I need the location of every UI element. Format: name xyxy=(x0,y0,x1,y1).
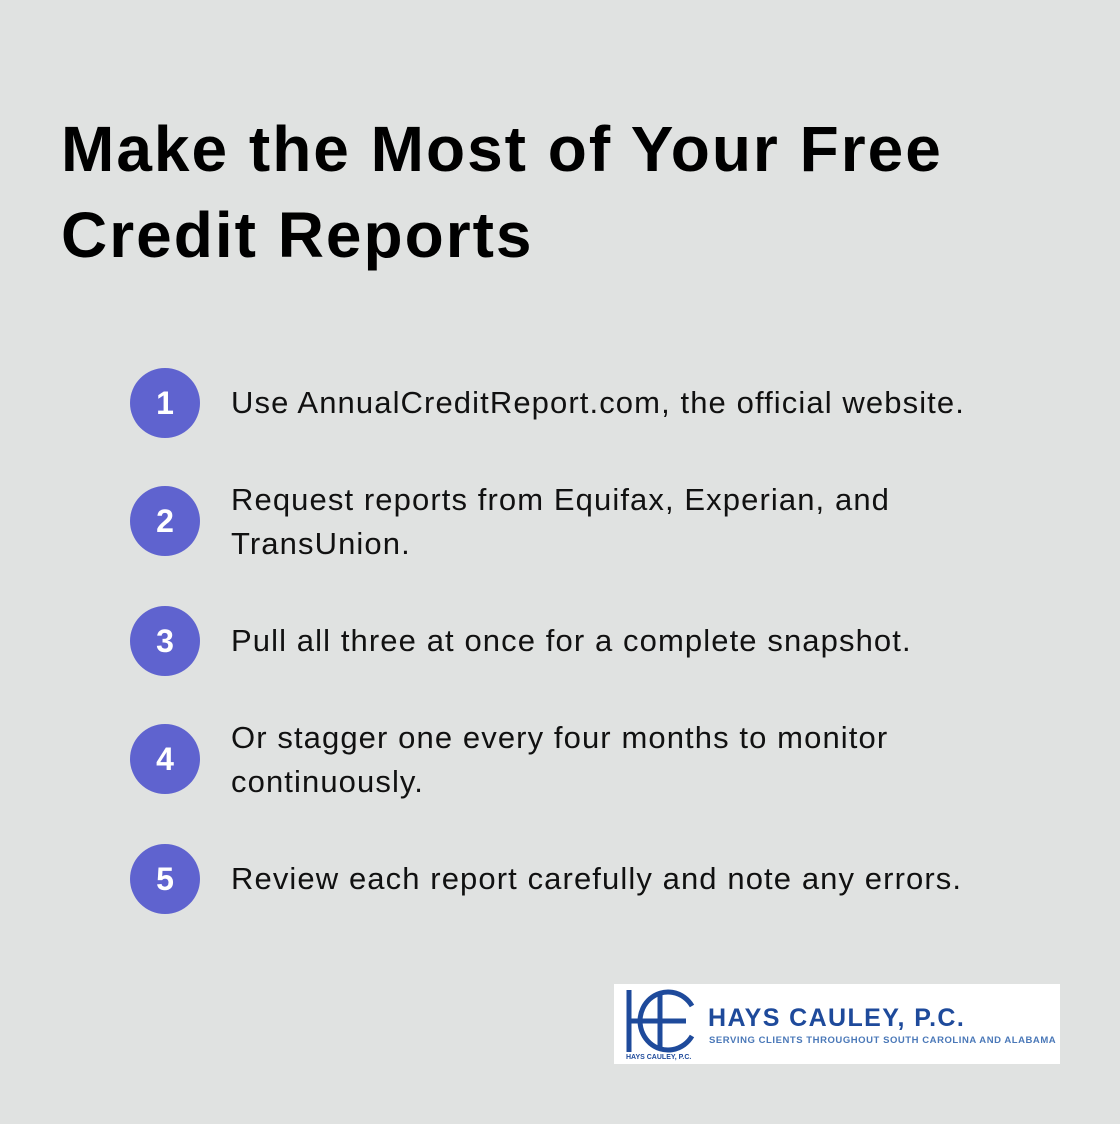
step 5: 5 xyxy=(156,861,174,897)
logo xyxy=(614,984,1060,1064)
title: Credit Reports xyxy=(61,199,534,271)
step 1: 1 xyxy=(156,385,174,421)
step 2: 2 xyxy=(156,503,174,539)
logo: HAYS CAULEY, P.C. xyxy=(708,1004,965,1032)
step 2: Request reports from Equifax, Experian, and TransUnion. xyxy=(231,482,890,561)
icon: HC monogram xyxy=(626,990,694,1052)
step 3 xyxy=(130,606,912,676)
title: Make the Most of Your Free xyxy=(61,113,943,185)
step 3: 3 xyxy=(156,623,174,659)
step 5 xyxy=(130,844,962,914)
step 5: Review each report carefully and note any errors. xyxy=(231,861,962,896)
logo: SERVING CLIENTS THROUGHOUT SOUTH CAROLINA AND ALABAMA xyxy=(709,1035,1056,1046)
step 1: Use AnnualCreditReport.com, the official website. xyxy=(231,385,965,420)
title xyxy=(61,113,943,271)
step 1 xyxy=(130,368,965,438)
step 4: 4 xyxy=(156,741,174,777)
logo: HAYS CAULEY, P.C. xyxy=(626,1054,691,1061)
step 3: Pull all three at once for a complete snapshot. xyxy=(231,623,912,658)
step 4: Or stagger one every four months to monitor continuously. xyxy=(231,720,888,799)
